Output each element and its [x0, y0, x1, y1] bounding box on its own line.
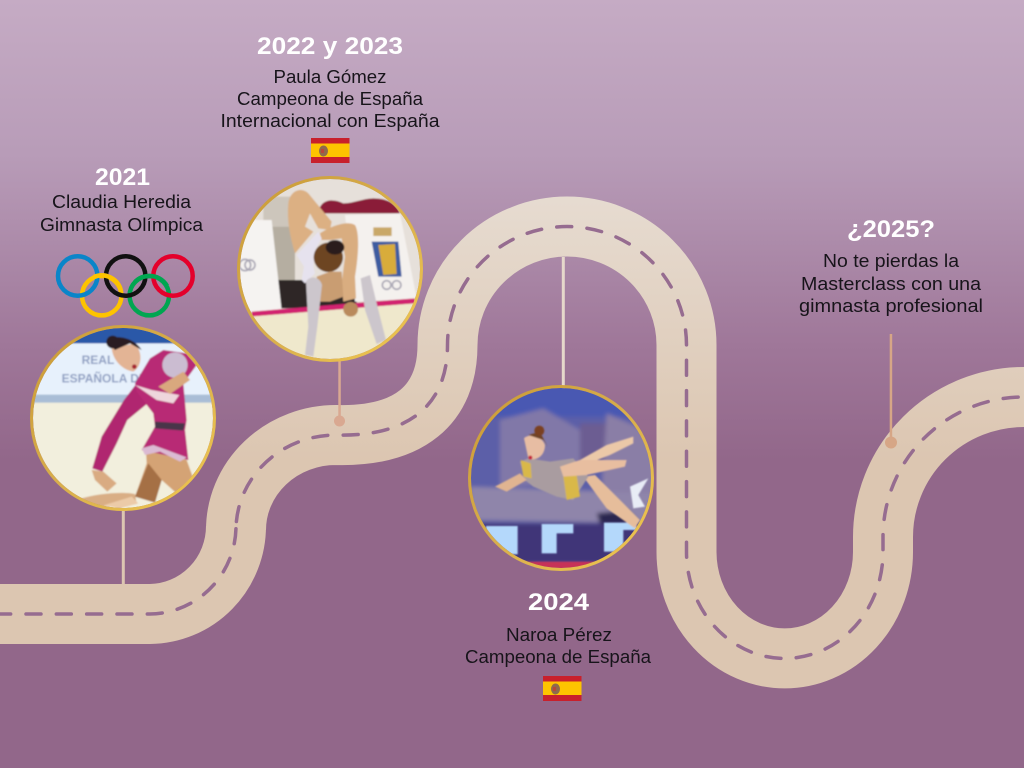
heading: 2021: 2021: [95, 164, 150, 191]
text: Paula Gómez: [220, 66, 440, 131]
photo: Paula Gómez: [237, 176, 423, 362]
text: Claudia Heredia: Claudia Heredia: [52, 191, 192, 212]
icon: olympic rings: [58, 256, 193, 315]
text: Paula Gómez: Paula Gómez: [274, 66, 386, 87]
icon: flag of Spain: [543, 676, 582, 701]
text: masterclass: [799, 250, 983, 316]
text: Paula Gómez: Internacional con España: [220, 110, 440, 131]
gold ring: [238, 178, 422, 360]
text: Naroa Pérez: Naroa Pérez: [506, 624, 612, 645]
text: Claudia Heredia: Gimnasta Olímpica: [40, 214, 204, 235]
text: Paula Gómez: Campeona de España: [237, 88, 424, 109]
text: Naroa Pérez: Campeona de España: [465, 646, 652, 667]
heading: ¿2025?: ¿2025?: [847, 216, 935, 243]
photo: Claudia Heredia: ESPAÑOLA DE: [62, 371, 147, 386]
connector: 2022 y 2023: [334, 358, 345, 426]
connector: 2025: [885, 334, 897, 448]
text: Naroa Pérez: [465, 624, 652, 667]
winding road: [0, 227, 1024, 658]
heading: 2024: 2024: [528, 589, 590, 616]
text: masterclass: No te pierdas la: [823, 250, 960, 271]
photo: Claudia Heredia: REAL: [82, 353, 114, 367]
icon: flag of Spain: [311, 138, 350, 163]
photo: Naroa Pérez: [468, 385, 654, 571]
photo: Claudia Heredia: [30, 325, 216, 511]
text: masterclass: Masterclass con una: [801, 273, 982, 294]
gold ring: [32, 326, 214, 510]
text: Claudia Heredia: [40, 191, 204, 235]
gold ring: [470, 386, 652, 570]
heading: 2022 y 2023: 2022 y 2023: [257, 33, 403, 60]
connector: 2021: [122, 505, 125, 585]
connector: 2024: [562, 257, 565, 390]
text: masterclass: gimnasta profesional: [799, 295, 983, 316]
